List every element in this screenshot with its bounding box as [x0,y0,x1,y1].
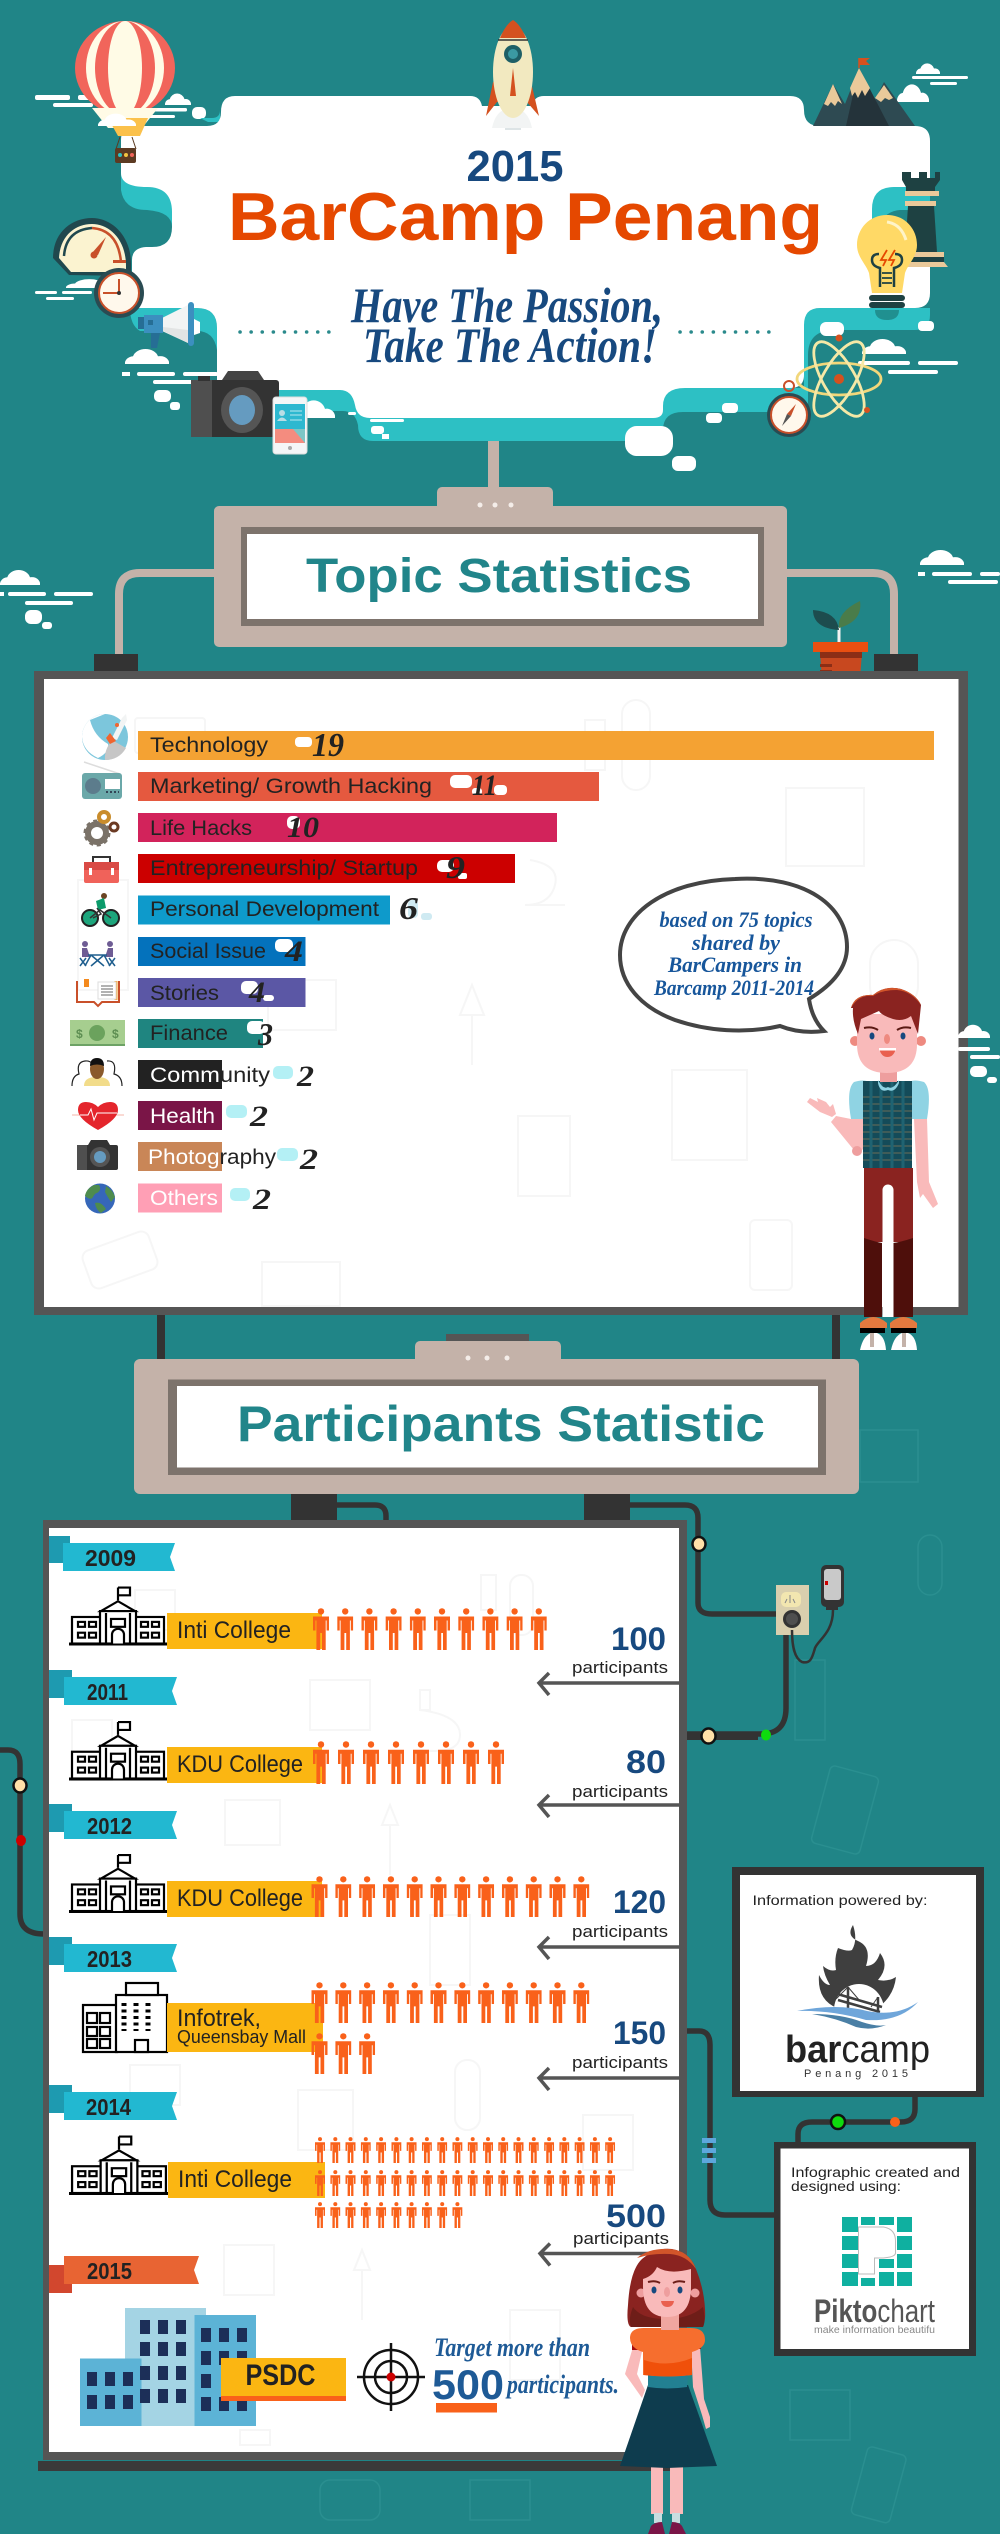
year banner 2013: 2013 [87,1946,132,1972]
arrow [539,1673,679,1695]
icon: hot air balloon [75,21,175,163]
count: 150 participants: 150 [613,2015,666,2051]
wires [0,1505,915,2215]
count: 100 participants [572,1621,668,1677]
legs [651,2466,663,2514]
year banner 2009 [49,1536,175,1571]
arrow [539,1795,679,1817]
face [643,2267,691,2317]
created with text: designed using: [791,2179,901,2194]
venue label: KDU College: KDU College [177,1751,303,1778]
venue label: PSDC [221,2358,346,2401]
chart: topic bars [138,727,934,1216]
icon: earth [85,1184,115,1214]
icon: money: $ [76,1027,83,1041]
venue label: Infotrek: Queensbay Mall [177,2027,306,2047]
people pictogram: 150 [312,1982,589,2074]
people pictogram: 100 [313,1608,547,1650]
bar: Photography [138,1142,318,1176]
icon: small camera [77,1140,118,1170]
arrow [539,1937,679,1959]
icon: chess rook [902,172,948,267]
count: 100 participants: 100 [611,1621,666,1657]
icon: briefcase [84,857,119,883]
piktochart icon [842,2217,912,2286]
icon: camera [191,371,279,437]
target text: Target more than [434,2333,590,2362]
character: woman [620,2249,717,2534]
bar: Personal Development: Personal Development [150,898,379,921]
venue label: Infotrek [167,2003,323,2052]
bar: Entrepreneurship [138,849,515,885]
bar: Entrepreneurship: 9 [446,849,465,885]
count: 120 participants: 120 [613,1884,666,1920]
venue label: PSDC: PSDC [246,2359,316,2392]
barcamp wordmark: barcamp [785,2029,930,2071]
icon: PSDC buildings [80,2308,256,2426]
bar: Community: 2 [296,1060,314,1093]
icon: technology globe rocket [82,714,128,760]
sleeves [849,1080,929,1119]
header banner: cyan ribbon [121,110,930,441]
year banner 2015: 2015 [87,2258,132,2284]
tagline: Have The Passion, [350,277,663,333]
vest [863,1081,912,1168]
decorative clouds and dashes [0,63,1000,629]
count: 100 participants: participants [572,1658,668,1677]
tagline dotted lines [240,330,779,334]
bar: Others: Others [150,1187,218,1210]
year banner 2012 [49,1804,177,1839]
title year: 2015 [466,142,564,191]
tagline [350,277,663,373]
callout: speech bubble: BarCampers in [667,952,802,977]
legs [864,1168,913,1242]
icon: speedometer and clock [53,218,144,318]
small cloud at board edge [958,1025,1000,1083]
icon: cyclist [82,893,119,926]
people pictogram: 120 [312,1876,589,1917]
bar: Community: Comm unity [150,1064,271,1087]
target text [432,2333,619,2412]
venue label: Infotrek: Infotrek, [177,2005,261,2032]
character: man [807,988,938,1350]
bar: Photography: Photography [148,1146,277,1169]
venue label: KDU College [167,1747,322,1783]
powered by text: Information powered by: [752,1893,928,1908]
icon: target [357,2343,425,2411]
bar: Community [138,1060,314,1093]
panel: topic statistics board [34,654,968,1315]
bar: Others [138,1183,271,1216]
wire blue connector [702,2138,716,2163]
heading panel: Participants Statistic: Participants Statistic [237,1396,765,1452]
hair back [627,2249,705,2327]
icon: radio [82,762,122,799]
year banner 2015 [49,2256,199,2293]
tagline: make information beautifu [814,2324,935,2336]
icon: potted plant [813,601,868,679]
venue label: Inti College: Inti College [177,1617,291,1644]
Penang 2015: Penang 2015 [804,2068,908,2080]
watermark icons inside participants board [72,1575,633,2445]
icon: light bulb [857,215,917,320]
topic icons column [70,714,128,1214]
bar: Others: 2 [252,1183,271,1216]
year banner 2012: 2012 [87,1813,132,1839]
bar: Health: 2 [249,1100,268,1133]
year banner 2011: 2011 [87,1679,128,1705]
icon: megaphone [138,302,200,348]
panel: piktochart box [774,2142,976,2356]
ears [636,2288,700,2298]
panel: participants board [38,1490,687,2471]
main title: BarCamp Penang [228,179,823,255]
venue label: KDU College: KDU College [177,1885,303,1912]
count: 500 participants [573,2198,669,2248]
panel: barcamp logo box [732,1867,984,2097]
icon: atom [797,334,881,423]
watermark icons inside topic board [78,700,918,1306]
count: 120 participants [572,1884,668,1941]
sign post [488,441,499,487]
bar: Personal Development [138,890,432,926]
callout: speech bubble: shared by [691,930,780,955]
icon: college building [69,2136,169,2194]
bar: Stories: Stories [150,982,219,1005]
count: 150 participants: participants [572,2053,668,2072]
bar: Finance: Finance [150,1022,228,1045]
hair [851,988,921,1034]
bar: Technology: Technology [150,734,269,757]
bar: Stories [138,976,306,1009]
year banner 2011 [49,1670,177,1705]
year banner 2014: 2014 [86,2094,131,2120]
icon: college building [69,1587,167,1644]
bar: Finance [138,1016,273,1052]
year row 2009 [49,1536,679,1695]
target text: 500 [432,2361,504,2408]
icon: money [70,1020,125,1046]
heading panel: Participants Statistic [134,1334,859,1494]
arms [831,1116,863,1155]
arrow [540,2244,655,2266]
count: 80 participants: 80 [626,1744,666,1780]
icon: rocket [486,20,539,130]
venue label: Inti College [168,2162,325,2198]
venue label: KDU College [167,1881,322,1917]
people pictogram: 80 [313,1741,504,1784]
right side notch behind rook [872,187,932,267]
year row 2014 [49,2085,669,2266]
wire nodes [14,1537,900,2129]
icon: college building [69,1722,167,1779]
heading panel: Topic Statistics [214,487,787,647]
count: 120 participants: participants [572,1922,668,1941]
bar: Marketing: Marketing/ Growth Hacking [150,775,432,798]
decorative white blobs over ribbon [295,321,934,471]
heading panel: Topic Statistics: Topic Statistics [306,550,692,603]
head [850,1036,860,1046]
year row 2012 [49,1804,679,1959]
bar: Finance: 3 [257,1016,273,1052]
count: 500 participants: participants [573,2229,669,2248]
created with text: Infographic created and [791,2165,960,2180]
icon: college building [69,1855,167,1912]
bar: Stories: 4 [248,976,265,1009]
bar: Technology [138,727,934,764]
Piktochart wordmark: Piktochart [814,2293,935,2329]
barcamp flame logo [797,1925,918,2029]
icon: social discussion [80,941,115,966]
year banner 2014 [49,2085,177,2120]
face features [870,1032,874,1040]
icon: community [72,1058,122,1086]
face features [652,2286,656,2294]
arrow [539,2068,679,2090]
icon: money: $ [112,1027,119,1041]
icon: gears [85,812,118,845]
shoes [860,1317,917,1328]
shoes [648,2522,686,2534]
bar: Social Issue [138,935,306,968]
bar: Life Hacks [138,811,557,844]
support arms [119,573,894,654]
bar: Photography: 2 [299,1143,318,1176]
count: 150 participants [572,2015,668,2072]
bar: Social Issue: Social Issue [150,940,266,963]
arms [625,2347,645,2398]
icon: office tower [83,1983,167,2052]
icon: mountains with flag [813,58,915,126]
bar: Marketing: 11 [472,769,497,802]
count: 80 participants [572,1744,668,1801]
year row 2011 [49,1670,679,1817]
venue label: Inti College [167,1613,322,1649]
bar: Health [138,1100,268,1133]
icon: smartphone [273,397,307,454]
year row 2015 [49,2256,619,2426]
icon: wall outlet and charger [776,1565,844,1662]
target text: participants. [505,2370,619,2399]
count: 80 participants: participants [572,1782,668,1801]
tagline: Take The Action! [363,317,657,373]
icon: compass [767,381,811,437]
icon: heart [72,1102,124,1130]
bar: Entrepreneurship: Entrepreneurship/ Startup [150,857,418,880]
bar: Social Issue: 4 [284,935,303,968]
posts between topic board and participants sign [157,1315,840,1360]
year banner 2009: 2009 [85,1545,136,1571]
callout: speech bubble [620,879,847,1032]
neck [661,2313,679,2330]
icon: book [77,979,119,1006]
background watermark icons [320,1430,942,2524]
bar: Technology: 19 [312,727,344,764]
bar: Life Hacks: 10 [287,811,319,844]
bar: Marketing [138,769,599,802]
neck and collar [880,1070,897,1082]
waistband [648,2375,688,2388]
bar: Personal Development: 6 [399,890,418,926]
skirt [620,2385,717,2468]
callout: speech bubble: Barcamp 2011-2014 [653,975,814,1000]
bar: Health: Health [150,1105,215,1128]
top [630,2328,705,2376]
created with text [791,2165,960,2194]
count: 500 participants: 500 [606,2198,666,2234]
year row 2013 [49,1937,679,2090]
callout: speech bubble: based on 75 topics [660,907,812,932]
year banner 2013 [49,1937,177,1972]
header banner: white panel [121,96,930,418]
venue label: Inti College: Inti College [178,2166,292,2193]
people pictogram: 500 [315,2137,615,2228]
bar: Life Hacks: Life Hacks [150,817,252,840]
